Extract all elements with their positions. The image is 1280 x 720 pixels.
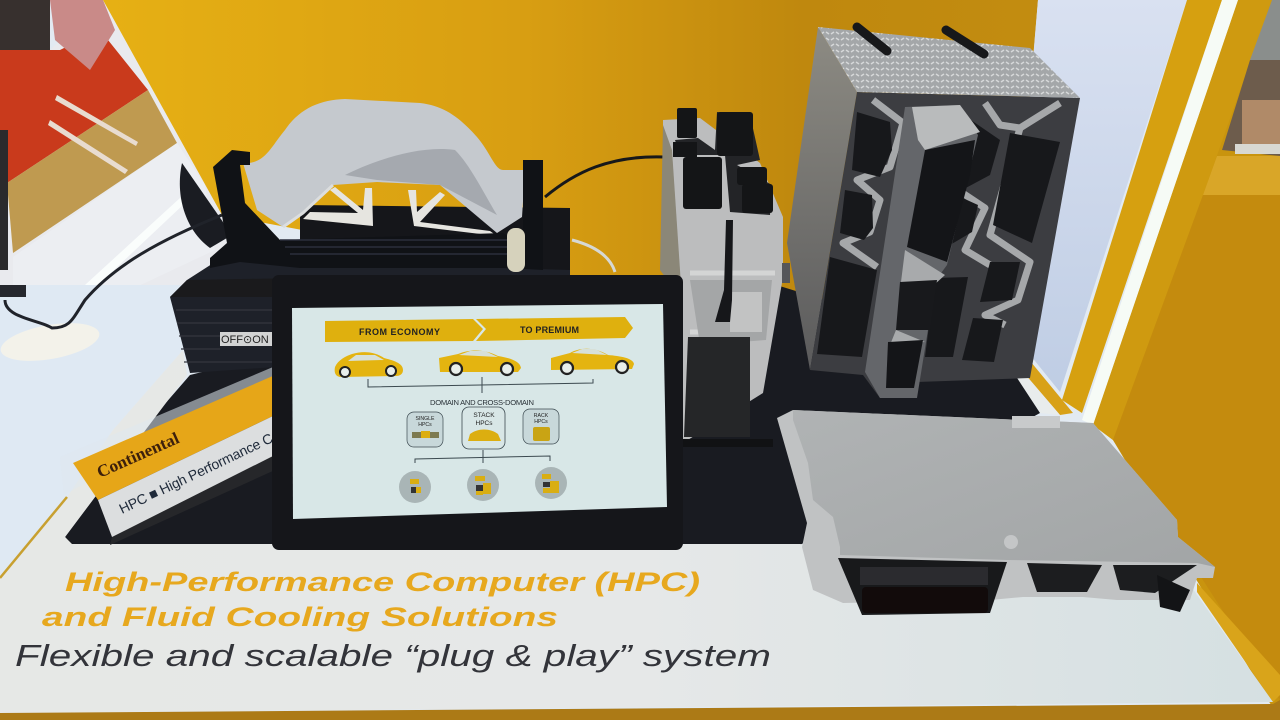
icon: rack solution (535, 467, 567, 499)
yellow table edge, right (992, 333, 1280, 702)
stack HPCs tile: HPCs (476, 420, 493, 427)
cable grommet (0, 215, 222, 367)
caption heading: High-Performance Computer (HPC) (65, 567, 700, 597)
icon: single solution (399, 471, 431, 503)
rack HPCs tile (523, 409, 559, 444)
cooling unit: white struts (303, 187, 497, 236)
single HPCs tile: SINGLE (415, 416, 435, 422)
icon: premium car (551, 349, 634, 374)
domain label: DOMAIN AND CROSS-DOMAIN (430, 398, 534, 407)
stack HPCs tile (462, 407, 505, 449)
dark display tray (65, 280, 1040, 545)
silver ribs (843, 100, 1060, 325)
tablet screen (292, 304, 667, 519)
white desk, left (0, 285, 240, 577)
yellow back wall (103, 0, 1038, 340)
white platform with printed caption (0, 350, 1280, 720)
black cable (545, 157, 665, 197)
single HPCs tile (407, 412, 443, 447)
grey cable (572, 240, 615, 272)
single HPCs tile: HPCs (418, 422, 432, 428)
caption heading: and Fluid Cooling Solutions (42, 602, 558, 632)
name card: Continental / HPC: Continental (94, 428, 182, 482)
banner: from economy to premium: FROM ECONOMY (359, 327, 440, 337)
cooling unit: dark base box (170, 262, 570, 373)
cooling unit: silver fluid pouch (243, 99, 525, 233)
tablet (272, 275, 683, 550)
name card: Continental / HPC: HPC ■ High Performance Co (116, 426, 282, 517)
banner: from economy to premium (325, 317, 633, 342)
rack HPCs tile: RACK (534, 413, 549, 419)
cooling unit: black bracket and fins (210, 150, 543, 272)
caption subheading: Flexible and scalable “plug & play” system (15, 638, 771, 673)
right white wall panel (1010, 0, 1187, 392)
name card: Continental / HPC (60, 367, 282, 545)
flat HPC module (777, 410, 1215, 615)
icon: mid-range car (439, 350, 521, 375)
small HPC stack (660, 108, 790, 447)
icon: economy car (335, 352, 403, 377)
cooling unit: black box behind fins (300, 205, 570, 270)
stack HPCs tile: STACK (473, 412, 495, 419)
black dome behind cooling unit (180, 163, 232, 248)
rack HPCs tile: HPCs (534, 419, 548, 425)
connector bays (817, 112, 1060, 362)
center column (865, 105, 978, 398)
cooling unit: dark base box: OFF⊙ON (221, 334, 269, 346)
caption heading (42, 567, 700, 632)
large HPC rack (787, 27, 1080, 398)
right yellow column with light strip (1062, 0, 1280, 720)
white roll (507, 228, 525, 272)
icon: stack solution (467, 469, 499, 501)
tread plate top (818, 27, 1080, 98)
banner: from economy to premium: TO PREMIUM (520, 325, 579, 335)
